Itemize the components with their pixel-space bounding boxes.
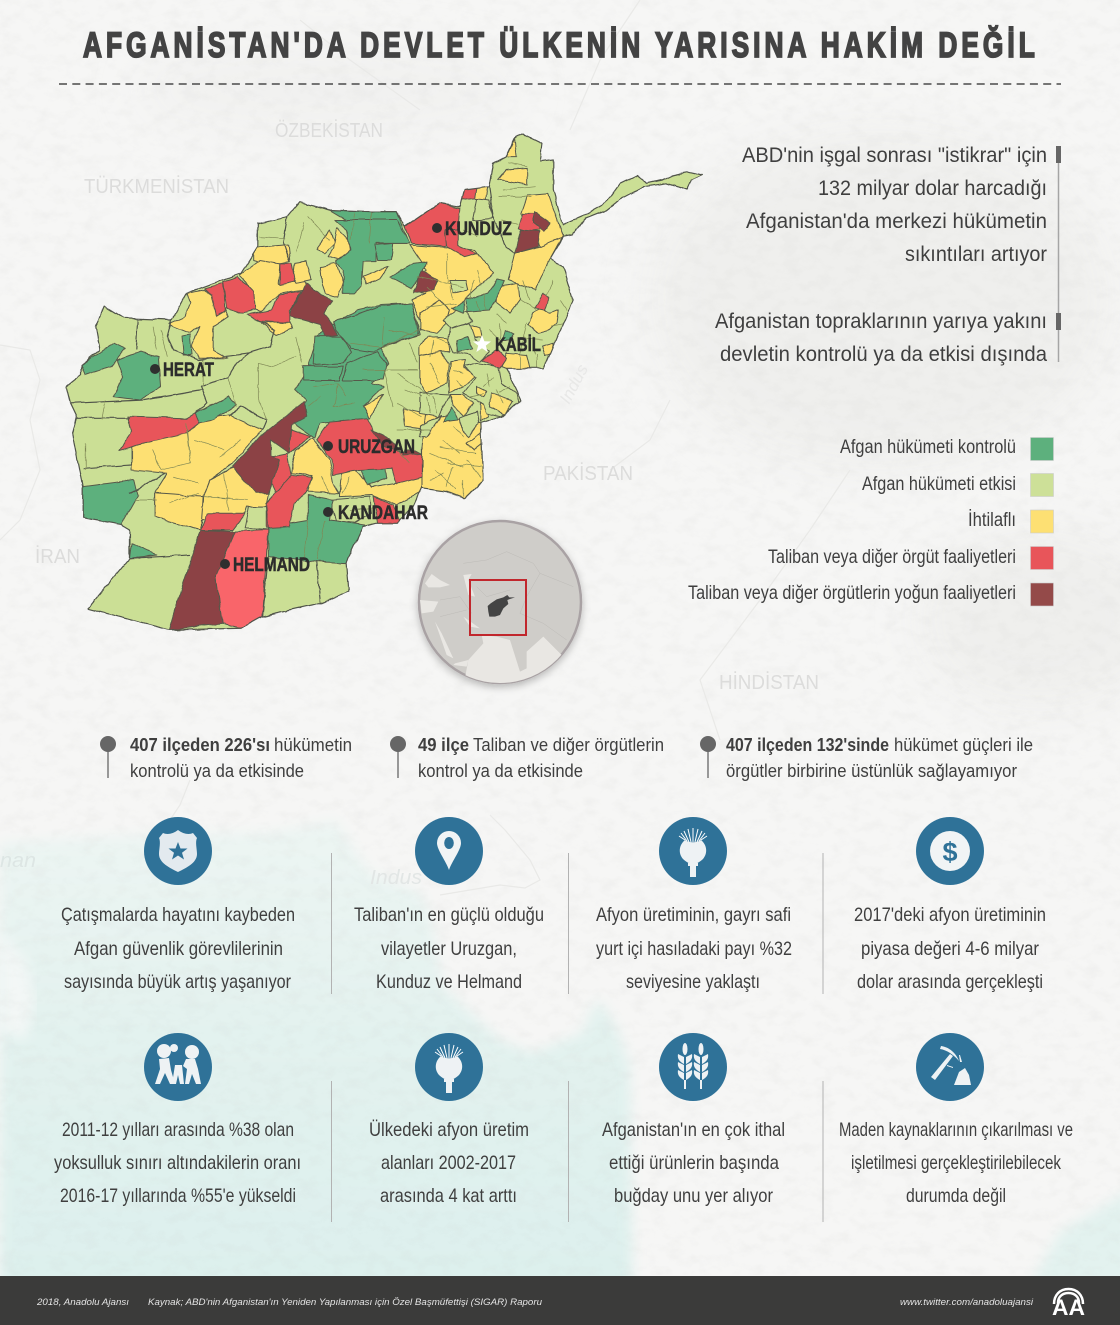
map of Afghanistan by district control xyxy=(66,134,702,630)
map regions: contested xyxy=(132,138,563,530)
footer: www.twitter.com/anadoluajansi xyxy=(900,1297,1034,1308)
card: opium cultivation area xyxy=(369,1033,529,1207)
faint neighbouring country names: PAKİSTAN xyxy=(543,462,633,485)
faint neighbouring country names: TÜRKMENİSTAN xyxy=(84,175,229,198)
map eastern provinces xyxy=(420,280,567,497)
card: security forces: sayısında büyük artış yaşanıyor xyxy=(64,971,291,993)
card: security forces xyxy=(61,817,295,993)
icon: wheat ears xyxy=(659,1033,727,1101)
card: opium cultivation area: Ülkedeki afyon üretim xyxy=(369,1119,529,1141)
legend: intense Taliban activity: Taliban veya diğer örgütlerin yoğun faaliyetleri xyxy=(688,583,1016,604)
title dashed divider xyxy=(59,83,1061,85)
legend: contested: İhtilaflı xyxy=(968,510,1016,531)
footer: Kaynak; ABD'nin Afganistan'ın Yeniden Yapılanması için Özel Başmüfettişi (SIGAR) Raporu xyxy=(148,1297,543,1308)
icon: poppy pod xyxy=(415,1033,483,1101)
map province boundaries xyxy=(71,187,515,617)
stat: 132 of 407 districts: örgütler birbirine üstünlük sağlayamıyor xyxy=(726,761,1017,781)
icon: police badge xyxy=(144,817,212,885)
card: opium cultivation area: arasında 4 kat arttı xyxy=(380,1185,517,1207)
faint neighbouring country names: Indus xyxy=(370,867,422,889)
locator red frame xyxy=(470,580,526,635)
icon: family carrying loads xyxy=(144,1033,212,1101)
city label: Kabil with star: KABİL xyxy=(495,335,541,356)
card: opium share of GDP: seviyesine yaklaştı xyxy=(626,971,760,993)
icon: dollar coin xyxy=(916,817,984,885)
map interior, clipped to country xyxy=(71,138,567,630)
card: poverty rate: 2011-12 yılları arasında %38 olan xyxy=(62,1119,294,1141)
map national outline xyxy=(66,134,702,630)
stat: 226 of 407 districts xyxy=(100,735,352,781)
intro paragraph 1: 132 milyar dolar harcadığı xyxy=(818,177,1047,200)
stat: 132 of 407 districts: 407 ilçeden 132'sinde xyxy=(726,735,889,755)
map base: government influence xyxy=(66,134,702,630)
stat: 226 of 407 districts: 407 ilçeden 226'sı xyxy=(130,735,270,755)
legend: government influence: Afgan hükümeti etkisi xyxy=(862,474,1016,495)
map district boundaries xyxy=(85,163,536,560)
card: Taliban strongholds: Taliban'ın en güçlü olduğu xyxy=(354,904,544,926)
card: mining resources: durumda değil xyxy=(906,1185,1006,1207)
card: wheat flour imports xyxy=(602,1033,785,1207)
card: opium share of GDP: Afyon üretiminin, gayrı safi xyxy=(596,904,791,926)
column dividers row 2 xyxy=(332,1081,823,1222)
city label: Kunduz: KUNDUZ xyxy=(445,219,512,240)
map regions: Taliban activity xyxy=(119,187,540,530)
faint neighbouring country names: Indus xyxy=(556,361,592,407)
city label: Helmand: HELMAND xyxy=(233,555,310,576)
card: Taliban strongholds: Kunduz ve Helmand xyxy=(376,971,522,993)
faint neighbouring country names: İRAN xyxy=(35,545,80,568)
intro paragraph 2: Afganistan topraklarının yarıya yakını xyxy=(715,310,1047,333)
card: poverty rate xyxy=(54,1033,301,1207)
faint neighbouring country names: ÖZBEKİSTAN xyxy=(275,119,383,142)
city label: Kandahar: KANDAHAR xyxy=(338,503,428,524)
card: poverty rate: yoksulluk sınırı altındakilerin oranı xyxy=(54,1152,301,1174)
intro text panel xyxy=(715,144,1061,366)
city label: Uruzgan: URUZGAN xyxy=(338,437,415,458)
intro paragraph 1 xyxy=(742,144,1047,266)
intro side rule with markers xyxy=(1056,146,1061,362)
legend: government control: Afgan hükümeti kontrolü xyxy=(840,437,1016,458)
stat: 49 districts: kontrol ya da etkisinde xyxy=(418,761,583,781)
card: wheat flour imports: Afganistan'ın en çok ithal xyxy=(602,1119,785,1141)
footer: 2018, Anadolu Ajansı xyxy=(36,1297,129,1308)
card: opium share of GDP: yurt içi hasıladaki payı %32 xyxy=(596,938,792,960)
faint neighbouring country names xyxy=(0,119,819,889)
card: wheat flour imports: buğday unu yer alıyor xyxy=(614,1185,773,1207)
stat: 49 districts: 49 ilçe xyxy=(418,735,469,755)
title: AFGANİSTAN'DA DEVLET ÜLKENİN YARISINA HAKİM DEĞİL xyxy=(83,25,1035,65)
stat: 49 districts xyxy=(390,735,664,781)
city label: Herat xyxy=(150,360,214,381)
Anadolu Agency logo: AA xyxy=(1052,1295,1085,1320)
faint neighbouring country names: nan xyxy=(0,850,36,872)
card: opium market value: 2017'deki afyon üretiminin xyxy=(854,904,1046,926)
faint neighbouring country names: HİNDİSTAN xyxy=(719,671,819,694)
card: mining resources: işletilmesi gerçekleştirilebilecek xyxy=(851,1152,1061,1174)
icon: pickaxe and ore xyxy=(916,1033,984,1101)
card: opium market value xyxy=(854,817,1046,993)
map regions: government influence patches xyxy=(245,198,494,530)
card: opium share of GDP xyxy=(596,817,792,993)
map region: southern Helmand xyxy=(216,530,268,628)
legend: Taliban activity: Taliban veya diğer örgüt faaliyetleri xyxy=(768,547,1016,568)
legend: contested xyxy=(968,510,1054,533)
card: Taliban strongholds: vilayetler Uruzgan, xyxy=(381,938,517,960)
stat: 132 of 407 districts xyxy=(700,735,1033,781)
stat: 226 of 407 districts: hükümetin xyxy=(274,735,352,755)
legend xyxy=(688,437,1054,606)
intro paragraph 2 xyxy=(715,310,1047,366)
stat: 226 of 407 districts: kontrolü ya da etkisinde xyxy=(130,761,304,781)
icon: poppy pod xyxy=(659,817,727,885)
card: poverty rate: 2016-17 yıllarında %55'e yükseldi xyxy=(60,1185,296,1207)
city label: Kabil with star xyxy=(473,335,541,356)
intro paragraph 1: sıkıntıları artıyor xyxy=(905,243,1047,266)
intro paragraph 2: devletin kontrolü ya da etkisi dışında xyxy=(720,343,1047,366)
card: mining resources xyxy=(839,1033,1073,1207)
intro paragraph 1: Afganistan'da merkezi hükümetin xyxy=(746,210,1047,233)
card: security forces: Afgan güvenlik görevlilerinin xyxy=(74,938,283,960)
card: wheat flour imports: ettiği ürünlerin başında xyxy=(609,1152,779,1174)
stat: 49 districts: Taliban ve diğer örgütlerin xyxy=(473,735,664,755)
card: opium market value: dolar arasında gerçekleşti xyxy=(857,971,1043,993)
map north-west provinces xyxy=(170,220,427,380)
stat: 132 of 407 districts: hükümet güçleri ile xyxy=(894,735,1033,755)
icon: location pin xyxy=(415,817,483,885)
intro paragraph 1: ABD'nin işgal sonrası "istikrar" için xyxy=(742,144,1047,167)
card: security forces: Çatışmalarda hayatını kaybeden xyxy=(61,904,295,926)
card: opium market value: piyasa değeri 4-6 milyar xyxy=(861,938,1039,960)
city label: Herat: HERAT xyxy=(163,360,214,381)
card: opium cultivation area: alanları 2002-2017 xyxy=(381,1152,516,1174)
icon: dollar coin: $ xyxy=(942,837,958,867)
map regions: intense Taliban activity xyxy=(169,212,550,630)
locator globe inset xyxy=(419,521,581,693)
card: Taliban strongholds xyxy=(354,817,544,993)
footer xyxy=(0,1276,1120,1325)
column dividers row 1 xyxy=(332,853,823,994)
map regions: government control xyxy=(81,210,420,563)
